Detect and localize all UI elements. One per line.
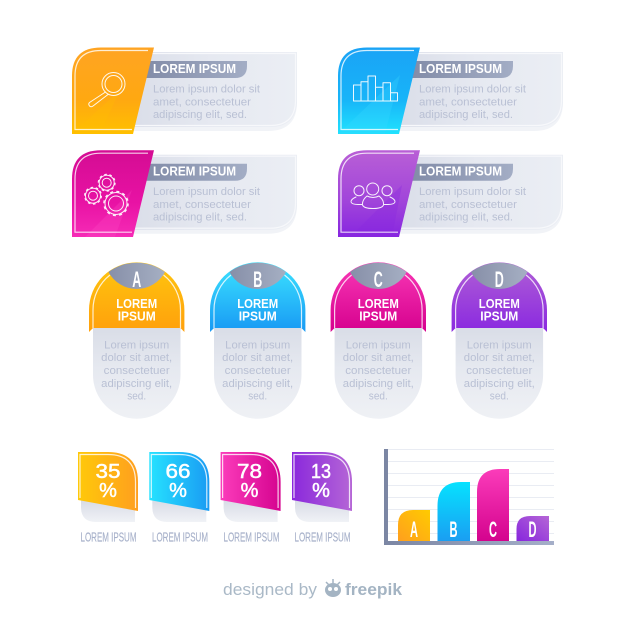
body text: amet, consectetuer xyxy=(153,96,251,108)
letter badge: B xyxy=(253,267,262,292)
body text: consectetuer xyxy=(104,365,170,377)
heading xyxy=(479,297,520,324)
body text: consectetuer xyxy=(345,365,412,377)
card: C xyxy=(331,262,426,419)
heading: IPSUM xyxy=(359,310,397,324)
bar A xyxy=(398,510,430,542)
stat: 78% xyxy=(221,452,281,544)
body text: Lorem ipsum dolor sit xyxy=(419,186,526,198)
bar D: D xyxy=(528,517,536,542)
bar chart xyxy=(384,449,554,545)
panel: search card xyxy=(72,48,297,134)
body text: sed. xyxy=(490,390,509,402)
body text: adipiscing elit, xyxy=(343,378,414,390)
panel: team card xyxy=(338,150,563,237)
coloured tab xyxy=(338,150,420,237)
letter badge xyxy=(108,263,165,292)
body text: dolor sit amet, xyxy=(343,352,414,364)
body text: dolor sit amet, xyxy=(222,352,293,364)
percentage xyxy=(166,461,190,502)
percentage xyxy=(237,461,262,502)
percentage: 13 xyxy=(311,461,331,483)
body text xyxy=(101,340,172,402)
bar B xyxy=(438,482,470,542)
percentage: 66 xyxy=(166,461,190,483)
footer credit: freepik xyxy=(345,580,403,599)
body text: consectetuer xyxy=(225,365,291,377)
bar B: B xyxy=(450,517,458,542)
coloured tab xyxy=(72,48,154,134)
body text: Lorem ipsum dolor sit xyxy=(153,84,260,96)
body text: Lorem ipsum xyxy=(467,340,532,352)
footer credit xyxy=(223,579,403,599)
panel: bars card xyxy=(338,48,563,134)
coloured cap xyxy=(210,262,305,332)
heading xyxy=(116,297,157,324)
caption: LOREM IPSUM xyxy=(294,530,350,544)
bar C: C xyxy=(489,517,497,542)
body text xyxy=(419,84,526,121)
card: D xyxy=(452,262,547,419)
body text xyxy=(222,340,293,402)
heading: LOREM xyxy=(116,297,157,311)
body text: dolor sit amet, xyxy=(101,352,172,364)
body text xyxy=(153,186,260,224)
stat: 66% xyxy=(149,452,209,544)
stat: 13% xyxy=(292,452,352,544)
body text: adipiscing elit, xyxy=(101,378,172,390)
percentage xyxy=(96,461,120,502)
letter badge xyxy=(350,263,407,292)
letter badge: D xyxy=(495,267,504,292)
body text: dolor sit amet, xyxy=(464,352,535,364)
coloured cap xyxy=(331,262,426,332)
percentage: 35 xyxy=(96,461,120,483)
axes xyxy=(384,449,554,545)
body text: amet, consectetuer xyxy=(419,199,517,211)
coloured cap xyxy=(452,262,547,332)
body text: Lorem ipsum xyxy=(225,340,290,352)
body text: sed. xyxy=(369,390,388,402)
body text xyxy=(464,340,535,402)
percentage: % xyxy=(312,480,330,502)
letter badge xyxy=(230,263,286,292)
card: B xyxy=(210,262,305,419)
body text: amet, consectetuer xyxy=(153,199,251,211)
icon: bar chart xyxy=(354,76,398,101)
bar D xyxy=(516,516,549,542)
title bar: LOREM IPSUM xyxy=(419,165,502,179)
body text: adipiscing elit, xyxy=(464,378,535,390)
heading: LOREM xyxy=(479,297,520,311)
letter badge xyxy=(471,263,528,292)
body text: Lorem ipsum dolor sit xyxy=(419,84,526,96)
icon: freepik mascot xyxy=(325,579,341,597)
panel: gears card xyxy=(72,150,297,237)
percentage: % xyxy=(169,480,187,502)
title bar: LOREM IPSUM xyxy=(153,165,236,179)
body text: adipiscing elit, xyxy=(222,378,293,390)
coloured tab xyxy=(338,48,420,134)
heading xyxy=(237,297,278,324)
percentage: 78 xyxy=(237,461,262,483)
body text xyxy=(343,340,414,402)
body text xyxy=(419,186,526,224)
letter badge: C xyxy=(374,267,383,292)
stat: 35% xyxy=(78,452,138,544)
heading: IPSUM xyxy=(239,310,277,324)
caption: LOREM IPSUM xyxy=(152,530,208,544)
icon: people xyxy=(351,183,395,208)
body text: consectetuer xyxy=(466,365,533,377)
title bar: LOREM IPSUM xyxy=(419,62,502,76)
body text: sed. xyxy=(127,390,146,402)
icon: gears xyxy=(85,174,128,216)
title bar: LOREM IPSUM xyxy=(153,62,236,76)
body text: Lorem ipsum xyxy=(104,340,169,352)
body text xyxy=(153,84,260,121)
letter badge: A xyxy=(132,267,141,292)
percentage: % xyxy=(241,480,259,502)
body text: Lorem ipsum dolor sit xyxy=(153,186,260,198)
caption: LOREM IPSUM xyxy=(80,530,136,544)
heading: LOREM xyxy=(358,297,399,311)
icon: magnifying glass xyxy=(89,72,125,107)
body text: adipiscing elit, sed. xyxy=(419,109,513,121)
heading xyxy=(358,297,399,324)
percentage: % xyxy=(99,480,117,502)
body text: adipiscing elit, sed. xyxy=(419,212,513,224)
heading: LOREM xyxy=(237,297,278,311)
body text: amet, consectetuer xyxy=(419,96,517,108)
body text: sed. xyxy=(248,390,267,402)
percentage xyxy=(311,461,331,502)
heading: IPSUM xyxy=(480,310,518,324)
heading: IPSUM xyxy=(118,310,156,324)
bar A: A xyxy=(410,517,418,542)
body text: adipiscing elit, sed. xyxy=(153,212,247,224)
footer credit: designed by xyxy=(223,580,318,599)
card: A xyxy=(89,262,184,419)
caption: LOREM IPSUM xyxy=(224,530,280,544)
body text: Lorem ipsum xyxy=(346,340,411,352)
body text: adipiscing elit, sed. xyxy=(153,109,247,121)
coloured cap xyxy=(89,262,184,332)
bar C xyxy=(477,469,509,542)
coloured tab xyxy=(72,150,154,237)
